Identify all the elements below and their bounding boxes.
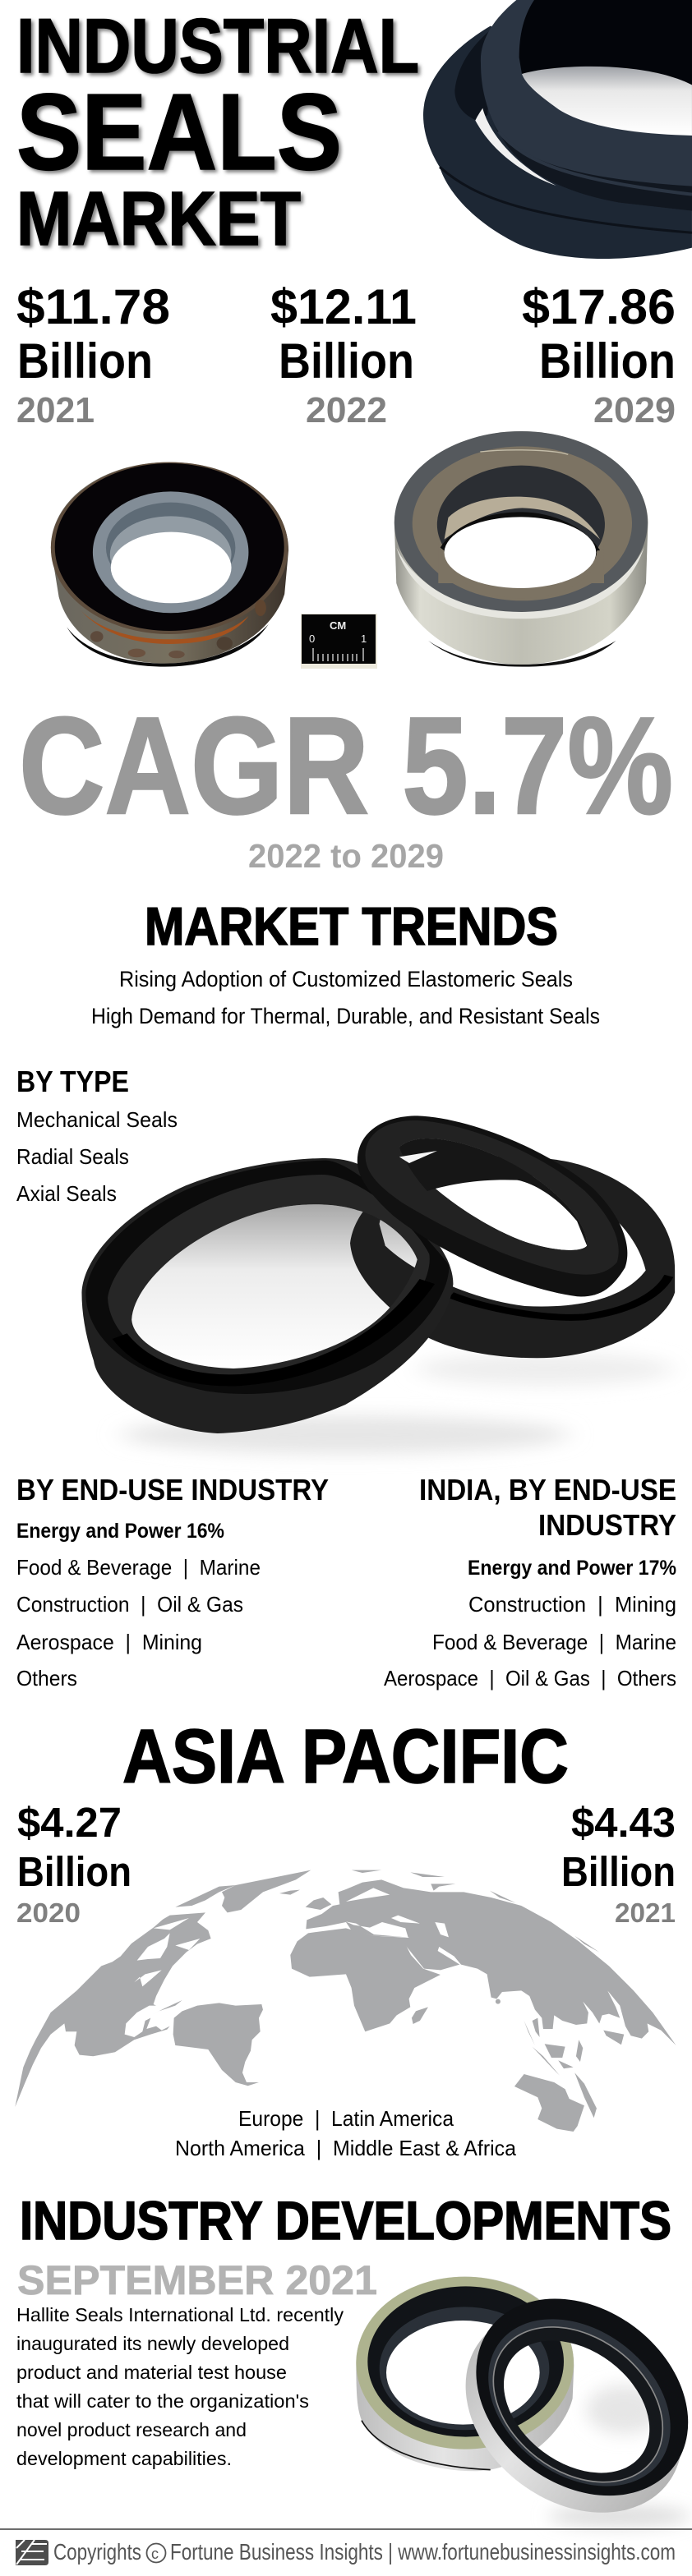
Asia Pacific 2020 value: Billion: [17, 1848, 131, 1895]
India, by end-use industry: Food & Beverage | Marine: [432, 1630, 676, 1654]
photo: scale card: [301, 614, 377, 669]
market trends list: Rising Adoption of Customized Elastomeric Seals: [119, 967, 573, 991]
copyright footer: Copyrights: [53, 2539, 141, 2564]
market size 2022: Billion: [279, 334, 414, 389]
other regions: Europe | Latin America: [238, 2106, 454, 2131]
photo: oil seals: [356, 2277, 689, 2533]
by end-use industry: Others: [16, 1666, 77, 1690]
title: SEALS: [16, 71, 342, 192]
Asia Pacific 2021 value: $4.43: [571, 1799, 676, 1846]
icon: Fortune Business Insights logo: [16, 2540, 48, 2565]
hero image: dark rubber seal rings: [423, 0, 692, 259]
development description: [16, 2304, 344, 2469]
photo: scale card: 1: [361, 632, 367, 645]
development description: that will cater to the organization's: [16, 2390, 309, 2412]
market size 2029: [522, 279, 676, 430]
photo: scale card: CM: [330, 619, 346, 632]
India, by end-use industry: Construction | Mining: [468, 1592, 676, 1617]
title: INDUSTRIAL: [16, 2, 419, 89]
by end-use industry: Energy and Power 16%: [16, 1520, 224, 1543]
world map: [15, 1870, 676, 2132]
market size 2021: [16, 279, 170, 430]
by end-use industry: Aerospace | Mining: [16, 1630, 202, 1654]
by type: [16, 1065, 178, 1206]
photo: rusty seal: [51, 462, 288, 667]
by end-use industry: Construction | Oil & Gas: [16, 1592, 243, 1617]
market size 2022: $12.11: [270, 279, 417, 334]
market size 2029: 2029: [593, 390, 676, 430]
Asia Pacific 2021 value: Billion: [561, 1848, 676, 1895]
India, by end-use industry: [384, 1473, 676, 1690]
Asia Pacific 2020 value: $4.27: [17, 1799, 122, 1846]
market size 2021: Billion: [17, 334, 153, 389]
India, by end-use industry: INDUSTRY: [538, 1508, 676, 1542]
market size 2022: [270, 279, 417, 430]
by type: Mechanical Seals: [16, 1107, 178, 1132]
market size 2021: $11.78: [16, 279, 170, 334]
other regions: [175, 2106, 517, 2160]
heading: market trends: MARKET TRENDS: [145, 896, 558, 956]
by type: Radial Seals: [16, 1144, 129, 1169]
market size 2021: 2021: [16, 390, 95, 430]
India, by end-use industry: INDIA, BY END-USE: [419, 1473, 676, 1506]
by type: Axial Seals: [16, 1181, 117, 1206]
market trends list: [91, 967, 600, 1028]
title: [16, 2, 419, 261]
CAGR period: 2022 to 2029: [248, 837, 444, 875]
other regions: North America | Middle East & Africa: [175, 2136, 517, 2160]
development date: SEPTEMBER 2021: [17, 2257, 377, 2303]
development description: product and material test house: [16, 2362, 287, 2383]
India, by end-use industry: Aerospace | Oil & Gas | Others: [384, 1666, 676, 1690]
by end-use industry: [16, 1473, 329, 1690]
India, by end-use industry: Energy and Power 17%: [468, 1557, 676, 1580]
market trends list: High Demand for Thermal, Durable, and Resistant Seals: [91, 1004, 600, 1028]
development description: novel product research and: [16, 2419, 247, 2440]
title: MARKET: [16, 176, 301, 261]
Asia Pacific 2021 value: [561, 1799, 676, 1928]
Asia Pacific 2020 value: [16, 1799, 131, 1928]
development description: inaugurated its newly developed: [16, 2333, 289, 2354]
Asia Pacific 2021 value: 2021: [615, 1898, 676, 1928]
market size 2029: Billion: [539, 334, 676, 389]
by type: BY TYPE: [16, 1065, 129, 1098]
by end-use industry: Food & Beverage | Marine: [16, 1555, 261, 1580]
heading: Asia Pacific: ASIA PACIFIC: [122, 1714, 569, 1799]
photo: scale card: 0: [309, 632, 315, 645]
market size 2029: $17.86: [522, 279, 676, 334]
market size 2022: 2022: [306, 390, 387, 430]
photo: black rubber rings: [81, 1116, 675, 1454]
by end-use industry: BY END-USE INDUSTRY: [16, 1473, 329, 1506]
Asia Pacific 2020 value: 2020: [16, 1898, 81, 1928]
footer divider: [0, 2528, 692, 2530]
development description: Hallite Seals International Ltd. recently: [16, 2304, 344, 2325]
development description: development capabilities.: [16, 2448, 232, 2469]
photo: steel seal: [394, 431, 648, 667]
copyright footer: c: [151, 2546, 159, 2562]
